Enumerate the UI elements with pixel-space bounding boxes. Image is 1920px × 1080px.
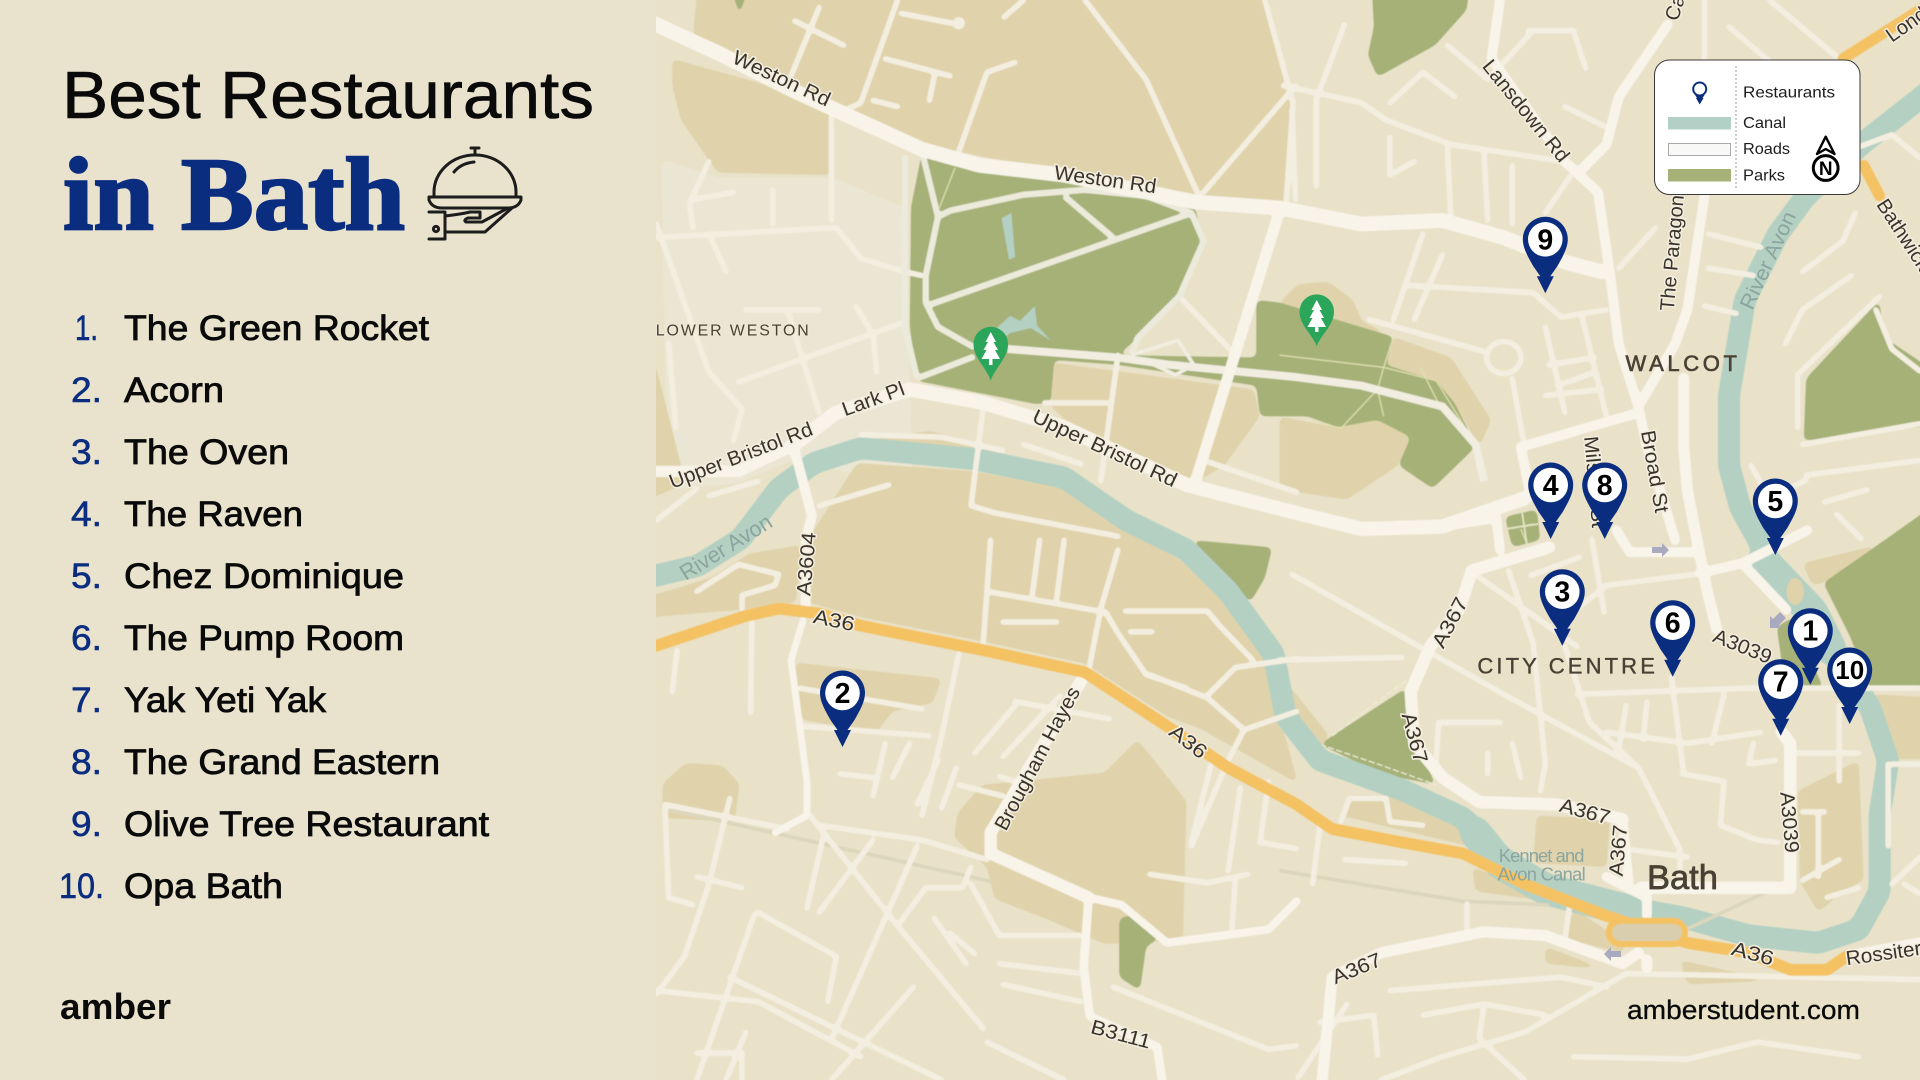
- icon: park marker east: [1300, 294, 1334, 346]
- map labels: A36: [811, 606, 857, 636]
- legend labels: Restaurants: [1743, 84, 1835, 102]
- map labels: Kennet and: [1499, 845, 1584, 866]
- pin 10: 10: [1835, 655, 1864, 685]
- parks: [730, 0, 1920, 991]
- park water and thin paths: [1002, 213, 1015, 260]
- map labels: Brougham Hayes: [991, 683, 1085, 834]
- pin 4: 4: [1543, 470, 1559, 502]
- map labels: A36: [1729, 938, 1776, 970]
- icon: north compass: [1813, 137, 1838, 180]
- list item 3: 3.: [71, 433, 102, 472]
- map labels: LOWER WESTON: [656, 323, 809, 340]
- pin 9: [1523, 217, 1568, 293]
- legend labels: Canal: [1743, 115, 1786, 132]
- list item 7: Yak Yeti Yak: [124, 681, 327, 720]
- one-way arrows: [1604, 543, 1786, 961]
- legend labels: [1743, 84, 1835, 184]
- list item 1: The Green Rocket: [124, 309, 429, 348]
- map labels: A36: [1165, 721, 1211, 764]
- legend labels: Roads: [1743, 141, 1790, 158]
- pin 9: 9: [1537, 224, 1553, 256]
- pin 8: 8: [1597, 470, 1613, 502]
- list item 10: [59, 867, 283, 906]
- list item 2: [71, 371, 224, 410]
- legend swatch: canal: [1668, 117, 1731, 130]
- map labels: Upper Bristol Rd: [666, 419, 816, 494]
- legend swatch: parks: [1668, 169, 1731, 182]
- map labels: B3111: [1088, 1016, 1153, 1054]
- tan land areas: [637, 0, 1920, 984]
- title: [62, 58, 594, 252]
- pin 7: 7: [1773, 667, 1789, 699]
- pin 1: [1788, 608, 1833, 685]
- panel: left sidebar: [0, 0, 656, 1080]
- list item 10: Opa Bath: [124, 867, 283, 906]
- pin 5: [1753, 478, 1798, 555]
- icon: park marker west: [974, 327, 1008, 380]
- list item 4: The Raven: [124, 495, 303, 534]
- restaurant list: [59, 309, 489, 906]
- pin 8: [1582, 462, 1627, 539]
- map labels: A367: [1557, 795, 1613, 829]
- map labels: A367: [1606, 824, 1632, 877]
- map labels: Weston Rd: [1053, 162, 1158, 198]
- pin 6: 6: [1665, 608, 1681, 640]
- icon: legend pin: [1693, 82, 1706, 104]
- map labels: Rossiter: [1845, 938, 1920, 970]
- map: [624, 0, 1920, 1080]
- map labels: Broad St: [1636, 429, 1672, 515]
- map labels: Milsom St: [1579, 435, 1609, 529]
- list item 6: The Pump Room: [124, 619, 404, 658]
- list item 4: 4.: [71, 495, 102, 534]
- map labels: Upper Bristol Rd: [1029, 406, 1180, 492]
- map labels: Lansdown Rd: [1478, 56, 1573, 167]
- minor roads: [656, 0, 1920, 1080]
- pin 2: 2: [835, 678, 850, 710]
- legend labels: Parks: [1743, 168, 1785, 184]
- map labels: A367: [1329, 949, 1385, 989]
- list item 6: 6.: [71, 619, 102, 658]
- pin 1: 1: [1802, 616, 1818, 648]
- list item 5: 5.: [71, 557, 102, 596]
- map labels: River Avon: [675, 509, 777, 585]
- map labels: WALCOT: [1626, 351, 1737, 376]
- A36 highway: [624, 0, 1920, 970]
- railway: [662, 808, 1776, 931]
- icon: north compass: N: [1819, 159, 1833, 180]
- pin 3: [1540, 569, 1585, 646]
- map labels: A3039: [1775, 791, 1802, 854]
- map labels: Lark Pl: [839, 378, 908, 421]
- map labels: The Paragon: [1657, 194, 1689, 312]
- list item 7: 7.: [71, 681, 102, 720]
- map labels: River Avon: [1736, 208, 1801, 313]
- panel: legend: [1654, 60, 1860, 194]
- list item 10: 10.: [59, 867, 104, 906]
- list item 9: 9.: [71, 805, 102, 844]
- title: Best Restaurants: [62, 58, 594, 133]
- website url: amberstudent.com: [1627, 995, 1860, 1025]
- pin 6: [1650, 600, 1695, 677]
- map labels: A3039: [1710, 625, 1775, 669]
- pin 5: 5: [1767, 486, 1783, 518]
- list item 8: 8.: [71, 743, 102, 782]
- list item 8: The Grand Eastern: [124, 743, 440, 782]
- list item 5: Chez Dominique: [124, 557, 404, 596]
- icon: serving cloche on hand: [429, 148, 521, 239]
- pin 2: [820, 670, 865, 747]
- list item 2: 2.: [71, 371, 102, 410]
- pin 10: [1827, 648, 1872, 724]
- list item 2: Acorn: [124, 371, 224, 410]
- map labels: Weston Rd: [729, 47, 834, 111]
- map labels: Avon Canal: [1498, 863, 1586, 884]
- list item 3: The Oven: [124, 433, 289, 472]
- map labels: A367: [1428, 594, 1473, 652]
- legend swatch: roads: [1668, 144, 1730, 156]
- map labels: CITY CENTRE: [1477, 653, 1655, 678]
- list item 9: Olive Tree Restaurant: [124, 805, 489, 844]
- map labels: Bath: [1647, 859, 1718, 897]
- major roads: [624, 0, 1920, 1080]
- park roads: [905, 152, 1204, 378]
- title: in Bath: [63, 137, 405, 252]
- pin 4: [1528, 462, 1573, 539]
- map labels: [656, 0, 1920, 1054]
- map labels: A367: [1397, 710, 1431, 766]
- pin 3: 3: [1554, 577, 1570, 609]
- light residential zone: [661, 159, 912, 490]
- logo: amber: amber: [60, 986, 171, 1027]
- map labels: A3604: [793, 531, 821, 597]
- list item 1: 1.: [75, 309, 98, 348]
- river and canal: [624, 67, 1920, 943]
- pin 7: [1758, 659, 1803, 736]
